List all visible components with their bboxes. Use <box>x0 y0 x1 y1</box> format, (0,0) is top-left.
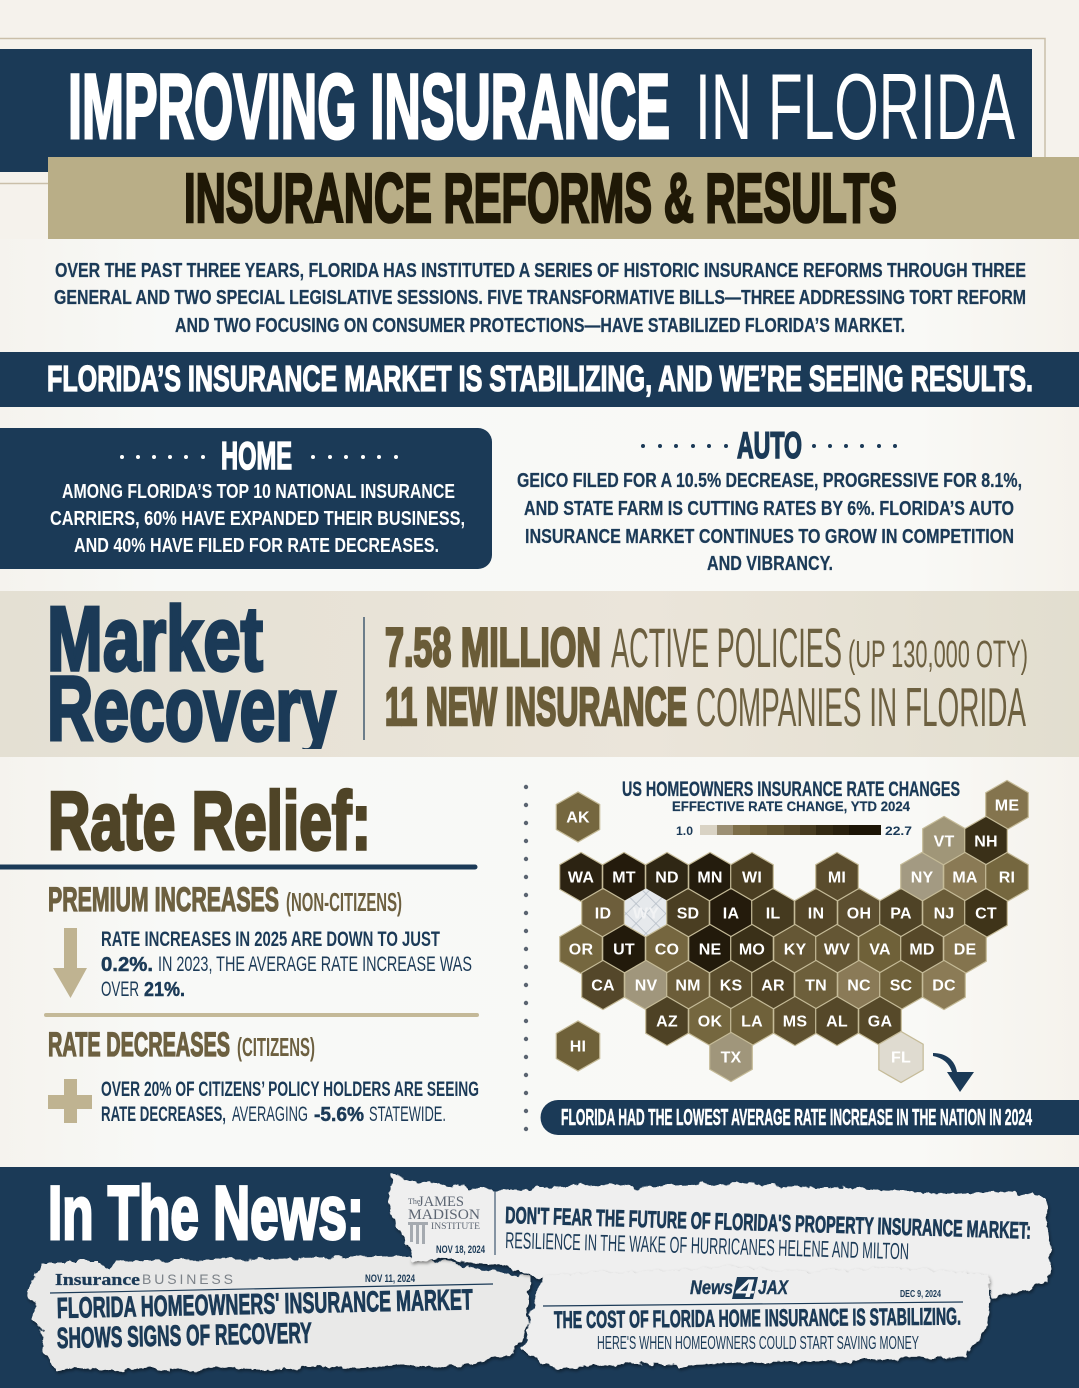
decreases text: AVERAGING <box>232 1103 308 1126</box>
panel: in the news <box>0 1167 1079 1388</box>
hex: DC: DC <box>932 978 956 994</box>
hex: MD: MD <box>909 942 935 958</box>
home dots <box>120 455 398 459</box>
hex: IA: IA <box>723 906 739 922</box>
market stat: active policies: ACTIVE POLICIES <box>611 616 842 679</box>
hex: ID <box>582 888 624 938</box>
hex: IA <box>710 888 752 938</box>
hex: MN <box>689 852 731 902</box>
premium text: 0.2%. <box>101 954 153 976</box>
hex: KS <box>710 960 752 1010</box>
hex: KS: KS <box>720 978 742 994</box>
jmi logo: INSTITUTE <box>431 1221 481 1231</box>
auto text <box>517 470 1022 575</box>
hex: ND: ND <box>655 870 679 886</box>
rate relief heading: Rate Relief: <box>48 776 371 867</box>
hex: WY <box>625 888 667 938</box>
premium text: OVER <box>101 978 139 1001</box>
hex: IL <box>752 888 794 938</box>
hex: WY: WY <box>633 906 659 922</box>
decreases text: OVER 20% OF CITIZENS’ POLICY HOLDERS ARE SEEING <box>101 1078 479 1101</box>
market recovery heading: Recovery <box>47 659 336 760</box>
hex: OK: OK <box>698 1014 722 1030</box>
hex: ME <box>986 780 1028 830</box>
hex: CT <box>965 888 1007 938</box>
auto dots <box>641 444 897 448</box>
hex: HI <box>556 1021 600 1071</box>
panel: rate relief <box>0 776 479 1126</box>
insurance business logo: BUSINESS <box>142 1271 233 1287</box>
map legend: 22.7 <box>885 826 912 838</box>
hex: UT <box>603 924 645 974</box>
market stat: active policies: 7.58 MILLION <box>385 616 601 678</box>
news4jax logo <box>690 1275 789 1303</box>
home text <box>50 481 465 557</box>
hex: VA <box>859 924 901 974</box>
hex: FL <box>879 1031 923 1083</box>
hex: DE <box>944 924 986 974</box>
news4jax logo: 4 <box>735 1275 755 1303</box>
hex: TX: TX <box>721 1050 742 1066</box>
hex: TN: TN <box>805 978 827 994</box>
hex: NM <box>667 960 709 1010</box>
jmi date: NOV 18, 2024 <box>436 1244 486 1256</box>
map legend <box>676 825 912 838</box>
news4jax date: DEC 9, 2024 <box>900 1289 941 1300</box>
hex: CO: CO <box>655 942 679 958</box>
hex: OH: OH <box>847 906 871 922</box>
hex: LA: LA <box>741 1014 763 1030</box>
intro text <box>54 260 1026 337</box>
premium text: RATE INCREASES IN 2025 ARE DOWN TO JUST <box>101 928 440 951</box>
hex: SD: SD <box>677 906 699 922</box>
navy rule <box>0 864 475 870</box>
hex: KY: KY <box>784 942 806 958</box>
decreases text <box>101 1078 479 1126</box>
hex: NE: NE <box>699 942 721 958</box>
auto heading: AUTO <box>737 425 802 466</box>
hex: KY <box>774 924 816 974</box>
rate decreases heading: RATE DECREASES <box>48 1026 230 1064</box>
hex: GA: GA <box>868 1014 892 1030</box>
hex: AK <box>556 792 600 842</box>
insurance business headline: SHOWS SIGNS OF RECOVERY <box>56 1318 312 1355</box>
jmi logo: The <box>408 1197 421 1206</box>
hex: CT: CT <box>975 906 997 922</box>
hex: NV: NV <box>635 978 657 994</box>
hex: AK: AK <box>566 810 590 826</box>
hex: VT <box>923 816 965 866</box>
hex: AL: AL <box>826 1014 848 1030</box>
hex: SD <box>667 888 709 938</box>
arrow to florida callout <box>933 1053 974 1092</box>
hex: RI: RI <box>999 870 1015 886</box>
clipping: insurance business <box>26 1256 530 1371</box>
hex: GA <box>859 996 901 1046</box>
hex: MI: MI <box>828 870 846 886</box>
hex: MT <box>603 852 645 902</box>
hex: ME: ME <box>995 798 1019 814</box>
insurance business logo <box>55 1270 233 1289</box>
jmi logo <box>408 1194 481 1244</box>
hex: NH: NH <box>974 834 998 850</box>
hex: DC <box>923 960 965 1010</box>
insurance business logo: Insurance <box>55 1270 141 1289</box>
home heading: HOME <box>221 435 292 478</box>
hex: DE: DE <box>954 942 976 958</box>
hex: MT: MT <box>612 870 636 886</box>
hex: OH <box>838 888 880 938</box>
jmi logo: MADISON <box>408 1207 480 1223</box>
hex: MD <box>901 924 943 974</box>
hex: LA <box>731 996 773 1046</box>
insurance business headline <box>56 1284 473 1355</box>
home text: AND 40% HAVE FILED FOR RATE DECREASES. <box>74 535 439 557</box>
news heading: In The News: <box>48 1171 364 1256</box>
hex: MI <box>816 852 858 902</box>
market recovery heading: Market <box>47 589 263 690</box>
dotted column divider <box>524 785 528 1131</box>
hex: TN <box>795 960 837 1010</box>
hex: MN: MN <box>697 870 723 886</box>
premium increases heading: (NON-CITIZENS) <box>286 887 402 917</box>
hex: RI <box>986 852 1028 902</box>
hex: HI: HI <box>570 1038 586 1056</box>
hex: ID: ID <box>595 906 611 922</box>
map legend: 1.0 <box>676 826 693 838</box>
decreases text: STATEWIDE. <box>369 1103 446 1126</box>
decreases text: -5.6% <box>314 1104 364 1126</box>
premium text: 21%. <box>144 979 185 1001</box>
hex: WV <box>816 924 858 974</box>
hex: IN <box>795 888 837 938</box>
hex: NJ: NJ <box>934 906 954 922</box>
hex map <box>556 780 1028 1083</box>
hex: NJ <box>923 888 965 938</box>
hex: OR: OR <box>569 942 593 958</box>
home text: AMONG FLORIDA’S TOP 10 NATIONAL INSURANCE <box>62 481 455 503</box>
icon: down arrow <box>53 928 87 998</box>
auto text: AND VIBRANCY. <box>707 553 833 575</box>
news4jax logo: News <box>690 1278 733 1299</box>
hex: SC: SC <box>890 978 913 994</box>
hex: AL <box>816 996 858 1046</box>
map title: EFFECTIVE RATE CHANGE, YTD 2024 <box>672 799 910 814</box>
hex: IN: IN <box>808 906 824 922</box>
hex: IL: IL <box>766 906 780 922</box>
premium text: IN 2023, THE AVERAGE RATE INCREASE WAS <box>158 953 472 976</box>
hex: NE <box>689 924 731 974</box>
hex: WI <box>731 852 773 902</box>
hex: ND <box>646 852 688 902</box>
hex: TX <box>710 1032 752 1082</box>
hex: NV <box>625 960 667 1010</box>
hex: CA: CA <box>591 978 615 994</box>
header frame <box>0 38 1045 184</box>
insurance business date: NOV 11, 2024 <box>365 1273 416 1285</box>
hex: NC: NC <box>847 978 871 994</box>
hex: MA <box>944 852 986 902</box>
hex: AZ <box>646 996 688 1046</box>
hex: OK <box>689 996 731 1046</box>
premium increases heading: PREMIUM INCREASES <box>48 881 279 919</box>
intro text: AND TWO FOCUSING ON CONSUMER PROTECTIONS—HAVE STABILIZED FLORIDA’S MARKET. <box>175 315 905 337</box>
hex: WV: WV <box>824 942 850 958</box>
market divider <box>363 617 365 740</box>
hex: VT: VT <box>934 834 954 850</box>
market stat: active policies <box>385 616 1028 679</box>
tan rule <box>46 1013 477 1017</box>
premium text <box>101 928 472 1001</box>
market recovery heading <box>50 602 338 749</box>
hex: MO <box>731 924 773 974</box>
hex: OR <box>560 924 602 974</box>
hex: CA <box>582 960 624 1010</box>
hex: AZ: AZ <box>656 1014 678 1030</box>
hex: NY <box>901 852 943 902</box>
decreases text: RATE DECREASES, <box>101 1103 226 1126</box>
clipping: news4jax <box>523 1266 990 1368</box>
hex: CO <box>646 924 688 974</box>
hex: MO: MO <box>739 942 765 958</box>
hex: VA: VA <box>869 942 891 958</box>
panel: home <box>0 428 492 569</box>
insurance business headline: FLORIDA HOMEOWNERS' INSURANCE MARKET <box>56 1284 473 1325</box>
hex: MS <box>774 996 816 1046</box>
icon: plus <box>48 1079 92 1123</box>
hex: UT: UT <box>613 942 635 958</box>
news4jax logo: JAX <box>758 1278 789 1299</box>
hex: MS: MS <box>783 1014 807 1030</box>
hex: MA: MA <box>952 870 978 886</box>
hex: PA: PA <box>890 906 912 922</box>
rate decreases heading: (CITIZENS) <box>237 1032 315 1062</box>
panel: market recovery <box>0 589 1079 760</box>
hex: WA <box>560 852 602 902</box>
hex: NH <box>965 816 1007 866</box>
home text: CARRIERS, 60% HAVE EXPANDED THEIR BUSINESS, <box>50 508 465 530</box>
hex: NM: NM <box>675 978 701 994</box>
hex: AR: AR <box>761 978 785 994</box>
hex: PA <box>880 888 922 938</box>
clipping: james madison institute <box>388 1173 1050 1297</box>
pale body background <box>0 239 1079 1167</box>
hex: SC <box>880 960 922 1010</box>
market stat: new companies: 11 NEW INSURANCE <box>385 677 687 737</box>
map title <box>622 778 960 814</box>
hex: NY: NY <box>911 870 933 886</box>
hex: WA: WA <box>568 870 594 886</box>
panel: auto <box>517 425 1022 575</box>
hex: FL: FL <box>891 1050 911 1066</box>
hex: AR <box>752 960 794 1010</box>
jmi logo: JAMES <box>418 1194 464 1210</box>
hex: NC <box>838 960 880 1010</box>
hex: WI: WI <box>742 870 762 886</box>
